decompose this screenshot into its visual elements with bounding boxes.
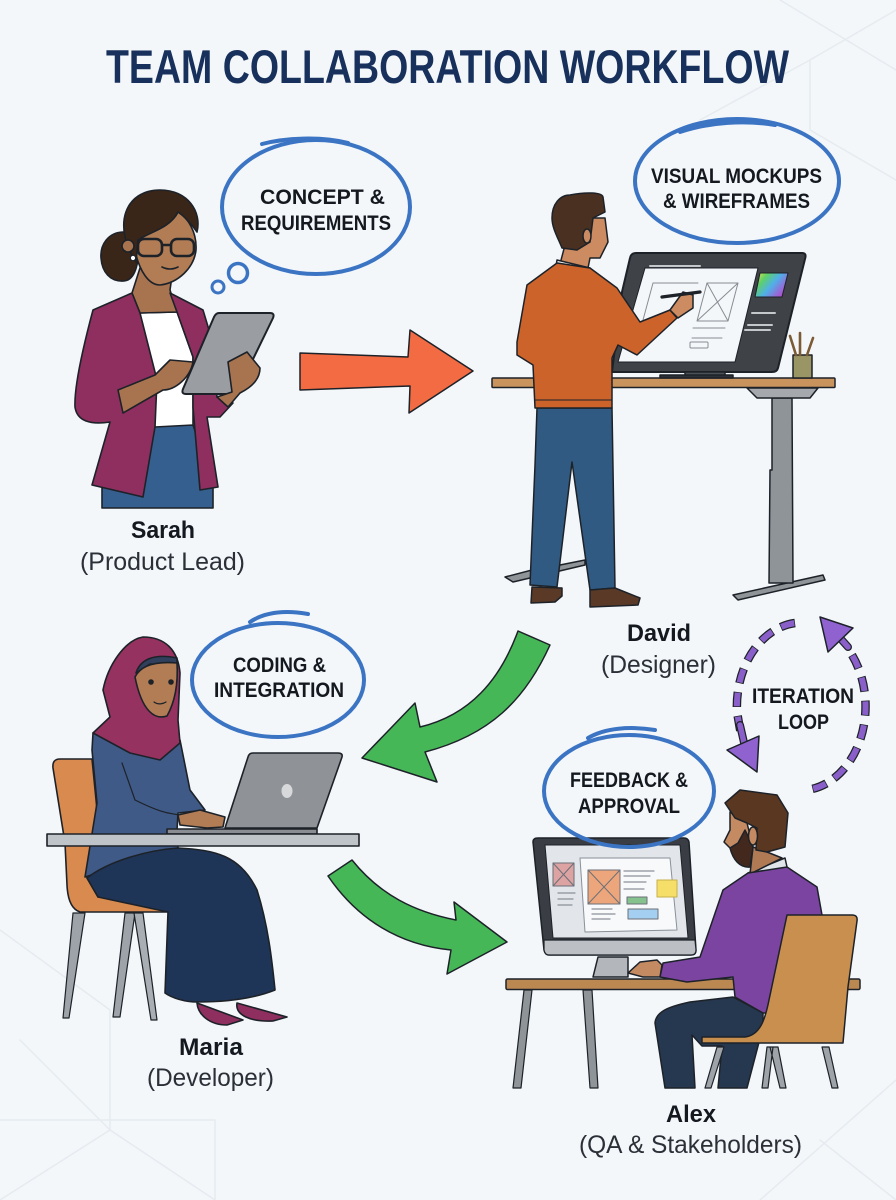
- label: Alex: [579, 1101, 802, 1159]
- blazer right: [170, 293, 233, 490]
- table: [47, 834, 359, 846]
- bubble: coding: CODING &: [233, 654, 326, 677]
- figure: Sarah: [75, 190, 274, 508]
- hand: [670, 292, 693, 318]
- trousers: [530, 408, 615, 590]
- bubble: feedback: FEEDBACK &: [570, 769, 688, 792]
- blazer left: [75, 293, 157, 497]
- tablet: [182, 313, 274, 394]
- label: iteration loop: ITERATION: [752, 685, 854, 708]
- forearm and hand: [118, 360, 193, 413]
- right hand: [217, 352, 260, 407]
- collar: [748, 858, 787, 878]
- label: Alex: Alex: [666, 1101, 717, 1128]
- hair: [552, 193, 605, 250]
- face: [724, 812, 753, 848]
- shoes: [197, 1003, 243, 1025]
- bubble: coding: [192, 612, 364, 737]
- thought bubble: concept: REQUIREMENTS: [241, 212, 391, 235]
- under-scarf: [136, 656, 177, 673]
- bubble: mockups: [635, 119, 839, 243]
- hair: [124, 190, 198, 262]
- chair: [53, 759, 168, 912]
- hair: [725, 790, 788, 852]
- label: Alex: (QA & Stakeholders): [579, 1131, 802, 1159]
- label: Maria: (Developer): [147, 1064, 274, 1092]
- label: Sarah: (Product Lead): [80, 548, 245, 576]
- laptop: [225, 753, 342, 828]
- beard: [730, 830, 753, 867]
- thought bubble: concept: [212, 139, 410, 293]
- bubble: mockups: VISUAL MOCKUPS: [651, 165, 822, 188]
- label: iteration loop: LOOP: [778, 711, 829, 734]
- hijab: [93, 637, 180, 760]
- desk legs: [505, 525, 585, 582]
- bubble: coding: INTEGRATION: [214, 679, 344, 702]
- pants: [102, 425, 213, 508]
- label: David: David: [627, 620, 691, 647]
- label: Maria: Maria: [179, 1034, 244, 1061]
- chair legs: [63, 913, 157, 1020]
- label: Sarah: [80, 517, 245, 576]
- skirt: [87, 848, 275, 1002]
- arrow: green to Maria: [362, 631, 550, 782]
- bubble: feedback: [544, 728, 714, 847]
- label: David: (Designer): [601, 651, 716, 679]
- collar: [556, 260, 590, 272]
- pen cup: [793, 355, 812, 378]
- monitor stand: [593, 957, 628, 977]
- torso: [85, 733, 205, 877]
- label: David: [601, 620, 716, 679]
- desk top: [492, 378, 835, 388]
- neck: [750, 847, 782, 874]
- iteration loop: [727, 617, 866, 789]
- neck and face: [560, 218, 608, 268]
- bubble: mockups: & WIREFRAMES: [663, 190, 810, 213]
- desk: [506, 979, 860, 990]
- figure: David with desk: [492, 193, 835, 607]
- chair back: [702, 915, 857, 1043]
- sweater: [660, 867, 822, 1013]
- arrow: green to Alex: [328, 860, 507, 974]
- label: Maria: [147, 1034, 274, 1092]
- arrow: orange: [300, 330, 473, 413]
- shoes: [531, 587, 562, 603]
- monitor: [533, 838, 696, 955]
- bubble: feedback: APPROVAL: [578, 795, 680, 818]
- face: [136, 212, 196, 285]
- legs: [655, 997, 763, 1088]
- figure: Alex with computer: [506, 790, 860, 1088]
- thought bubble: concept: CONCEPT &: [260, 186, 385, 209]
- hair bun: [101, 232, 138, 281]
- face: [135, 663, 177, 717]
- hand: [628, 960, 662, 977]
- hand: [178, 810, 225, 828]
- label: iteration loop: [752, 685, 854, 734]
- sweater: [517, 263, 677, 408]
- monitor: [612, 253, 806, 372]
- desk legs: [513, 990, 598, 1088]
- neck: [132, 268, 177, 313]
- chair legs: [705, 1047, 838, 1088]
- figure: Maria with laptop: [47, 637, 359, 1025]
- label: Sarah: Sarah: [131, 517, 195, 544]
- top: [140, 312, 193, 427]
